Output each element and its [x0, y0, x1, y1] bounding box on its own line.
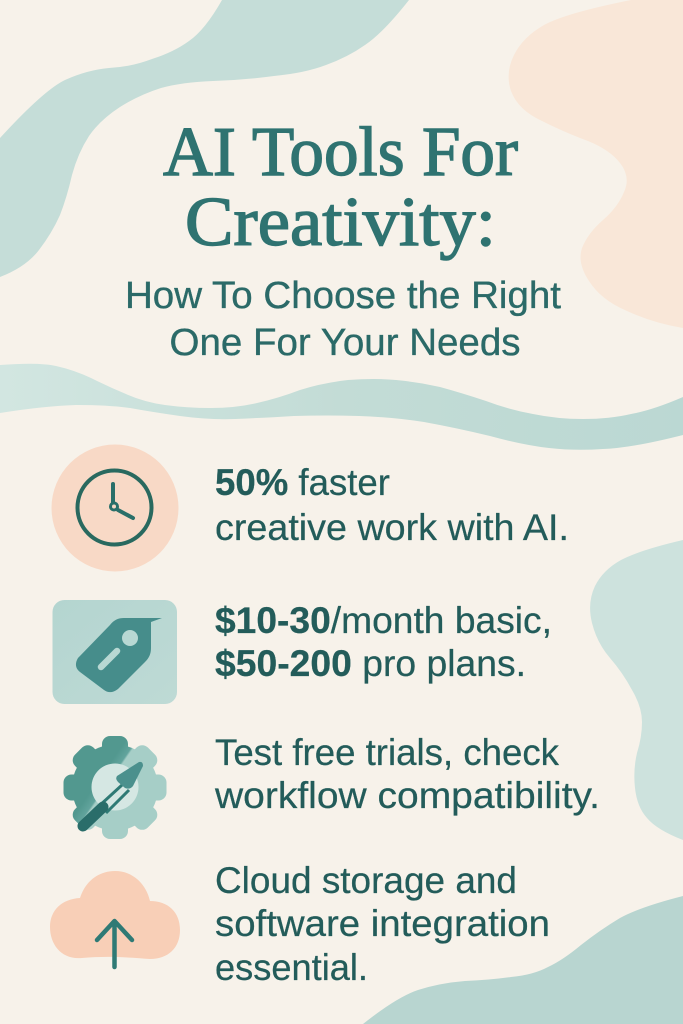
text: pricing: $10-30/month basic,: [215, 600, 552, 641]
text: faster creative work: [215, 462, 569, 548]
subtitle: One For Your Needs: [170, 322, 520, 364]
blob: bottom right teal: [363, 896, 683, 1024]
text: pricing: $50-200 pro plans.: [215, 643, 526, 684]
text: cloud storage: software integration: [215, 903, 550, 944]
text: trials: Test free trials, check: [215, 732, 559, 773]
text: pricing: [215, 600, 552, 684]
text: trials: [214, 732, 600, 816]
subtitle: How To Choose the Right: [125, 275, 561, 317]
icon: price tag: [52, 600, 177, 704]
text: cloud storage: essential.: [215, 947, 368, 988]
blob: top right peach: [509, 0, 683, 328]
icon: clock: [52, 444, 178, 572]
title: Creativity:: [185, 184, 496, 261]
blob: top left teal: [0, 0, 409, 277]
icon: gear with dropper: [64, 736, 166, 839]
wave divider: [0, 364, 683, 450]
text: trials: workflow compatibility.: [214, 775, 600, 816]
text: cloud storage: Cloud storage and: [215, 860, 517, 901]
blob: right teal: [590, 540, 683, 840]
icon: cloud upload: [50, 871, 180, 967]
title: [163, 114, 518, 261]
text: faster creative work: 50% faster: [215, 462, 390, 503]
title: AI Tools For: [163, 114, 518, 191]
subtitle: [125, 275, 561, 364]
text: cloud storage: [215, 860, 550, 988]
text: faster creative work: creative work with AI.: [215, 507, 569, 548]
